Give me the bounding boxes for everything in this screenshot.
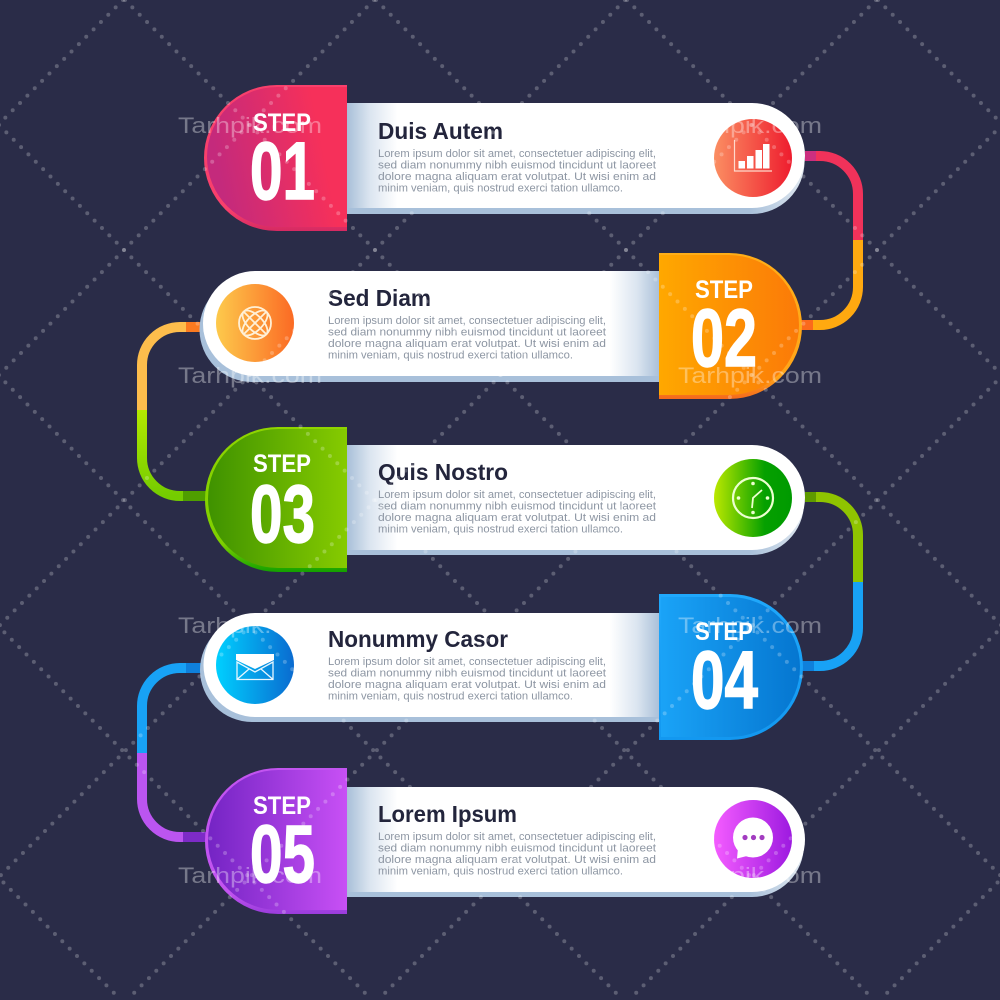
panel: step 3 — [205, 427, 805, 572]
text block: step 2: minim veniam, quis nostrud exerci tation ullamco. — [328, 350, 573, 362]
badge: step 4 — [659, 594, 803, 740]
badge: step 5: 05 — [250, 809, 315, 900]
connector: step 3 to step 4 — [801, 497, 858, 666]
text block: step 1: sed diam nonummy nibh euismod tincidunt ut laoreet — [378, 160, 656, 172]
text block: step 4: dolore magna aliquam erat volutpat. Ut wisi enim ad — [328, 679, 606, 691]
icon: globe — [216, 284, 294, 362]
text block: step 5: Lorem ipsum dolor sit amet, consectetuer adipiscing elit, — [378, 831, 656, 843]
watermarks: Tarhpik.com — [678, 363, 822, 388]
icon: bar chart — [714, 119, 792, 197]
card: step 1 — [347, 103, 805, 214]
card: step 4 — [200, 613, 660, 722]
card: step 3 — [347, 445, 805, 555]
icon: chat bubble — [714, 800, 792, 878]
watermarks: Tarhpik.com — [678, 113, 822, 138]
badge: step 3: STEP — [253, 450, 311, 478]
heading: Duis Autem: Duis Autem — [378, 118, 503, 144]
text block: step 5: minim veniam, quis nostrud exerci tation ullamco. — [378, 866, 623, 878]
heading: Quis Nostro: Quis Nostro — [378, 459, 508, 485]
text block: step 5 — [378, 831, 656, 878]
text block: step 1 — [378, 148, 656, 194]
text block: step 3: Lorem ipsum dolor sit amet, consectetuer adipiscing elit, — [378, 489, 656, 501]
text block: step 4 — [328, 656, 606, 702]
connector: step 4 to step 5 — [142, 668, 206, 837]
badge: step 1 — [204, 85, 347, 231]
card: step 2 — [200, 271, 660, 382]
text block: step 2: Lorem ipsum dolor sit amet, consectetuer adipiscing elit, — [328, 315, 606, 327]
icon: envelope — [216, 626, 294, 704]
panel: step 5 — [205, 768, 805, 914]
badge: step 1: 01 — [250, 126, 315, 217]
text block: step 2: sed diam nonummy nibh euismod tincidunt ut laoreet — [328, 326, 606, 338]
watermarks: Tarhpik.com — [178, 113, 322, 138]
text block: step 3 — [378, 489, 656, 536]
badge: step 1: STEP — [253, 109, 311, 137]
text block: step 5: sed diam nonummy nibh euismod tincidunt ut laoreet — [378, 842, 656, 854]
badge: step 4: 04 — [691, 635, 758, 726]
card: step 5 — [347, 787, 805, 897]
badge: step 4: STEP — [695, 618, 753, 646]
text block: step 2 — [328, 315, 606, 362]
connector: step 2 to step 3 — [142, 327, 206, 496]
text block: step 4: Lorem ipsum dolor sit amet, consectetuer adipiscing elit, — [328, 656, 606, 668]
badge: step 3: 03 — [250, 469, 315, 560]
text block: step 1: dolore magna aliquam erat volutpat. Ut wisi enim ad — [378, 171, 656, 183]
text block: step 3: sed diam nonummy nibh euismod tincidunt ut laoreet — [378, 500, 656, 512]
panel: step 4 — [200, 594, 803, 740]
heading: Lorem Ipsum: Lorem Ipsum — [378, 801, 517, 827]
connector: step 1 to step 2 — [799, 156, 858, 325]
watermarks: Tarhpik.com — [678, 613, 822, 638]
text block: step 2: dolore magna aliquam erat volutpat. Ut wisi enim ad — [328, 338, 606, 350]
badge: step 3 — [205, 427, 347, 572]
text block: step 4: sed diam nonummy nibh euismod tincidunt ut laoreet — [328, 668, 606, 680]
text block: step 4: minim veniam, quis nostrud exerci tation ullamco. — [328, 690, 573, 702]
watermarks: Tarhpik.com — [678, 863, 822, 888]
badge: step 5 — [205, 768, 347, 914]
icon: clock — [714, 459, 792, 537]
watermarks: Tarhpik.com — [178, 863, 322, 888]
text block: step 5: dolore magna aliquam erat volutpat. Ut wisi enim ad — [378, 854, 656, 866]
watermarks: Tarhpik.com — [178, 363, 322, 388]
text block: step 3: dolore magna aliquam erat volutpat. Ut wisi enim ad — [378, 512, 656, 524]
text block: step 1: Lorem ipsum dolor sit amet, consectetuer adipiscing elit, — [378, 148, 656, 160]
heading: Sed Diam: Sed Diam — [328, 285, 431, 311]
badge: step 5: STEP — [253, 792, 311, 820]
text block: step 1: minim veniam, quis nostrud exerci tation ullamco. — [378, 182, 623, 194]
badge: step 2 — [659, 253, 802, 399]
watermarks — [178, 113, 822, 888]
heading: Nonummy Casor: Nonummy Casor — [328, 626, 508, 652]
panel: step 2 — [200, 253, 802, 399]
text block: step 3: minim veniam, quis nostrud exerci tation ullamco. — [378, 524, 623, 536]
watermarks: Tarhpik.com — [178, 613, 322, 638]
panel: step 1 — [204, 85, 805, 231]
badge: step 2: STEP — [695, 276, 753, 304]
badge: step 2: 02 — [691, 293, 757, 384]
